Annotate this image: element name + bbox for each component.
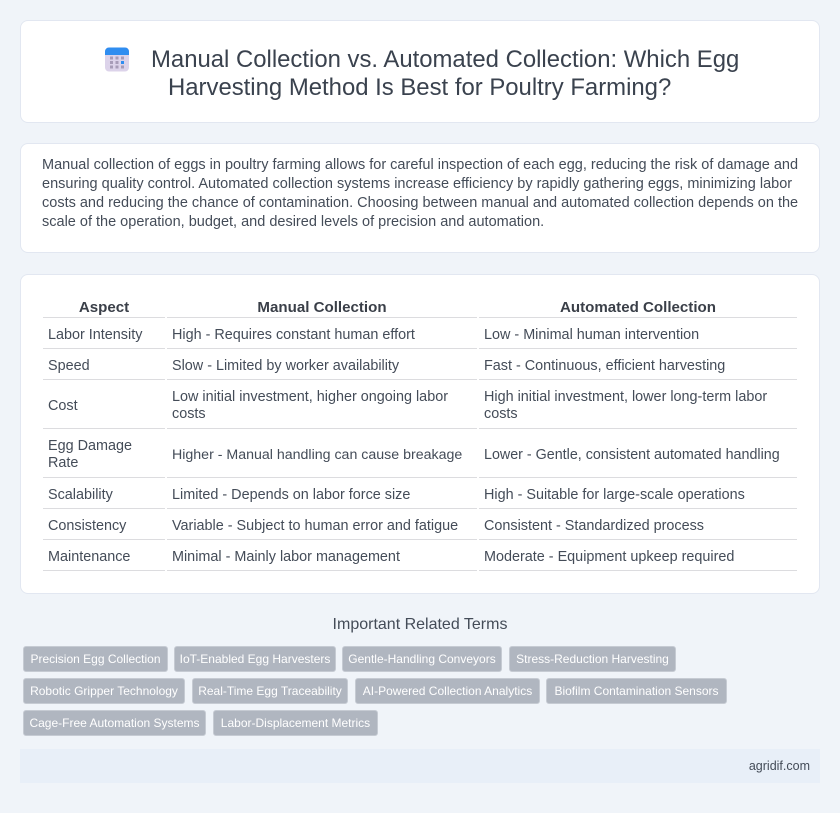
row: maintenance	[48, 549, 734, 565]
panel: header	[20, 20, 820, 123]
tag	[509, 646, 676, 672]
table header	[79, 299, 716, 316]
title: Harvesting Method Is Best for Poultry Farming?	[168, 74, 671, 101]
row: speed: Speed	[48, 358, 90, 374]
row: cost: Low initial investment, higher ongoing labor	[172, 389, 448, 405]
row: labor intensity: Low - Minimal human intervention	[484, 327, 699, 343]
tags: related terms	[23, 646, 727, 736]
row: labor intensity	[48, 327, 699, 343]
row: cost: costs	[484, 406, 518, 422]
row: egg damage rate: Higher - Manual handling can cause breakage	[172, 447, 462, 463]
tag	[23, 710, 206, 736]
heading: important related terms: Important Related Terms	[333, 616, 507, 633]
panel: introduction	[20, 143, 820, 253]
row: consistency: Consistent - Standardized process	[484, 518, 704, 534]
tag: Robotic Gripper Technology	[30, 684, 178, 698]
row: maintenance: Maintenance	[48, 549, 130, 565]
tag	[23, 678, 185, 704]
tag: Precision Egg Collection	[30, 652, 161, 666]
tag: Cage-Free Automation Systems	[29, 716, 200, 730]
row: maintenance: Moderate - Equipment upkeep required	[484, 549, 734, 565]
tag: AI-Powered Collection Analytics	[363, 684, 532, 698]
table header: Aspect	[79, 299, 129, 316]
row: speed: Fast - Continuous, efficient harvesting	[484, 358, 725, 374]
row: labor intensity: High - Requires constant human effort	[172, 327, 415, 343]
tag	[174, 646, 336, 672]
tag: IoT-Enabled Egg Harvesters	[180, 652, 330, 666]
row: consistency	[48, 518, 704, 534]
row: maintenance: Minimal - Mainly labor management	[172, 549, 400, 565]
tag: Biofilm Contamination Sensors	[554, 684, 719, 698]
row: egg damage rate: Rate	[48, 455, 78, 471]
tag: Gentle-Handling Conveyors	[348, 652, 496, 666]
text block: introduction: ensuring quality control. Automated collection systems increase efficiency by rapidly gathering eggs, minimizing labor	[42, 176, 792, 192]
tag: Real-Time Egg Traceability	[198, 684, 342, 698]
row: egg damage rate: Egg Damage	[48, 438, 132, 454]
row: speed	[48, 358, 725, 374]
row: speed: Slow - Limited by worker availability	[172, 358, 399, 374]
row: egg damage rate: Lower - Gentle, consistent automated handling	[484, 447, 780, 463]
text block: introduction: costs and reducing the chance of contamination. Choosing between manual and automated collection depends on the	[42, 195, 798, 211]
row: consistency: Consistency	[48, 518, 126, 534]
row: cost: High initial investment, lower long-term labor	[484, 389, 767, 405]
row: cost: Cost	[48, 398, 78, 414]
footer bar	[20, 749, 820, 783]
row: scalability: High - Suitable for large-scale operations	[484, 487, 745, 503]
table header: Manual Collection	[257, 299, 387, 316]
table header: Automated Collection	[560, 299, 716, 316]
tag	[342, 646, 502, 672]
tag	[23, 646, 168, 672]
row: consistency: Variable - Subject to human error and fatigue	[172, 518, 458, 534]
text block: introduction: scale of the operation, budget, and desired levels of precision and automation.	[42, 214, 544, 230]
title	[151, 46, 739, 101]
tag	[192, 678, 348, 704]
tag	[213, 710, 378, 736]
text block: introduction: Manual collection of eggs in poultry farming allows for careful inspection of each egg, reducing the risk of damage and	[42, 157, 798, 173]
tag: Stress-Reduction Harvesting	[516, 652, 669, 666]
row: cost: costs	[172, 406, 206, 422]
text block: introduction	[42, 157, 798, 230]
footer source: agridif.com	[749, 759, 810, 773]
tag	[546, 678, 727, 704]
row: scalability	[48, 487, 745, 503]
row: egg damage rate	[48, 438, 780, 471]
icon: calendar	[105, 48, 129, 72]
tag	[355, 678, 540, 704]
row: cost	[48, 389, 767, 422]
tag: Labor-Displacement Metrics	[221, 716, 370, 730]
row: scalability: Limited - Depends on labor force size	[172, 487, 410, 503]
panel: comparison table	[20, 274, 820, 594]
row: labor intensity: Labor Intensity	[48, 327, 142, 343]
title: Manual Collection vs. Automated Collection: Which Egg	[151, 46, 739, 73]
row: scalability: Scalability	[48, 487, 113, 503]
